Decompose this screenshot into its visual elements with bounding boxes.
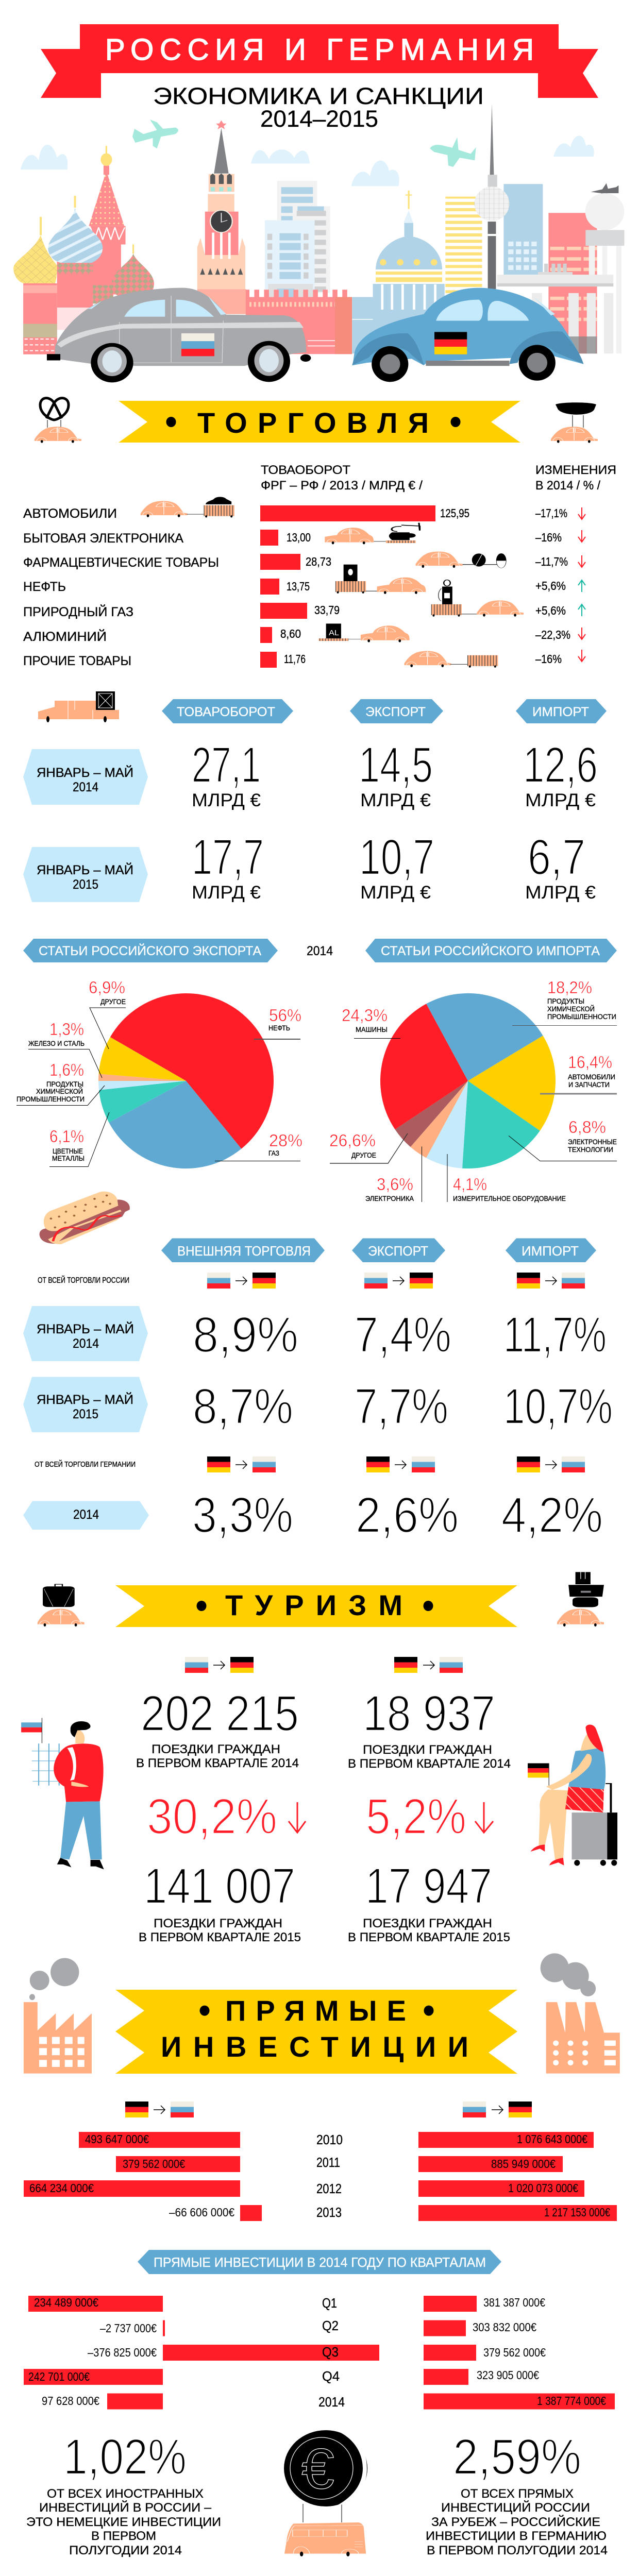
export pie labels: 6,9%	[89, 978, 125, 997]
tourism: germans to russia: В ПЕРВОМ КВАРТАЛЕ 2015	[348, 1930, 510, 1944]
values 2015: МЛРД €	[360, 883, 431, 903]
quarter labels	[318, 2295, 345, 2410]
investment flags	[125, 2102, 532, 2117]
percentages 2014: 8,9%	[193, 1307, 298, 1363]
callout: 2.59 percent: ЗА РУБЕЖ – РОССИЙСКИЕ	[431, 2515, 600, 2529]
export pie labels: МЕТАЛЛЫ	[52, 1154, 85, 1162]
export pie labels: ХИМИЧЕСКОЙ	[36, 1087, 83, 1095]
tourism: germans to russia: 17 947	[365, 1858, 492, 1914]
bar chart: quarterly investment germany to russia: –376 825 000€	[88, 2346, 157, 2359]
values 2014: МЛРД €	[360, 790, 431, 810]
quarter labels: 2014	[318, 2394, 345, 2410]
panel: foreign trade share headers	[161, 1239, 596, 1262]
callout: 2.59 percent: В ПЕРВОМ ПОЛУГОДИИ 2014	[427, 2544, 608, 2557]
bar chart: annual investment russia to germany: 885 949 000€	[491, 2157, 556, 2171]
import pie labels: И ЗАПЧАСТИ	[568, 1080, 610, 1089]
import pie labels: ХИМИЧЕСКОЙ	[547, 1004, 595, 1013]
import pie labels: ДРУГОЕ	[351, 1151, 376, 1159]
export pie labels	[16, 978, 302, 1166]
callout: 1.02 percent: 1,02%	[63, 2429, 187, 2485]
trade table heading: ТОВАОБОРОТ	[261, 463, 350, 477]
trade table category labels: ПРОЧИЕ ТОВАРЫ	[23, 654, 131, 668]
pie headers	[23, 939, 617, 962]
period label: january-may 2014 share: ЯНВАРЬ – МАЙ	[37, 1321, 134, 1336]
import pie labels: 4,1%	[453, 1175, 487, 1194]
trade row icons: cars pulling goods	[141, 497, 524, 668]
label: share of all german trade with flags: ОТ ВСЕЙ ТОРГОВЛИ ГЕРМАНИИ	[35, 1460, 136, 1469]
callout: 1.02 percent: ОТ ВСЕХ ИНОСТРАННЫХ	[47, 2487, 204, 2501]
bar chart: annual investment germany to russia: 379 562 000€	[123, 2157, 185, 2171]
import pie labels: 6,8%	[568, 1117, 606, 1137]
trade table heading	[261, 463, 616, 493]
trade table changes and arrows: –11,7%	[535, 555, 568, 568]
values 2015	[192, 829, 596, 903]
bar chart: annual investment russia to germany	[418, 2132, 617, 2221]
panel: turnover headers: ТОВАРОБОРОТ	[177, 705, 275, 719]
values 2014: 14,5	[359, 737, 433, 793]
panel: foreign trade share headers: ЭКСПОРТ	[368, 1243, 428, 1259]
trade table heading: ИЗМЕНЕНИЯ	[535, 463, 616, 477]
export pie labels: ПРОДУКТЫ	[46, 1080, 83, 1088]
values 2014	[192, 737, 598, 810]
callout: 1.02 percent: В ПЕРВОМ	[91, 2529, 156, 2543]
tourism: germans to russia: ПОЕЗДКИ ГРАЖДАН	[363, 1743, 492, 1757]
values 2015: 10,7	[359, 829, 434, 885]
values 2015: МЛРД €	[192, 883, 261, 903]
percentages 2014	[193, 1307, 607, 1363]
export pie labels: ЖЕЛЕЗО И СТАЛЬ	[28, 1039, 85, 1047]
heading: quarterly investment	[138, 2250, 501, 2274]
tourism: russians to germany: 30,2%	[147, 1788, 277, 1844]
values 2015: 6,7	[528, 829, 585, 885]
import pie labels: 3,6%	[377, 1175, 413, 1194]
bar chart: quarterly investment russia to germany	[424, 2296, 615, 2409]
tourism: russians to germany: ПОЕЗДКИ ГРАЖДАН	[152, 1742, 280, 1756]
section banner: trade: ТОРГОВЛЯ	[197, 406, 429, 439]
tourism: russians to germany: ПОЕЗДКИ ГРАЖДАН	[154, 1917, 282, 1930]
export pie labels: ГАЗ	[268, 1149, 279, 1157]
trade table changes and arrows: –16%	[535, 652, 562, 666]
bar chart: quarterly investment germany to russia: –2 737 000€	[100, 2321, 157, 2335]
figure: man with russian flag	[21, 1718, 104, 1869]
section banner: direct investment: ПРЯМЫЕ	[225, 1994, 406, 2027]
export pie labels: 28%	[269, 1131, 302, 1150]
aluminium label: AL	[329, 629, 339, 637]
planes	[132, 120, 476, 167]
quarter labels: Q3	[322, 2344, 339, 2360]
icon: factory right	[541, 1953, 620, 2074]
title ribbon: РОССИЯ И ГЕРМАНИЯ	[105, 33, 534, 66]
label: share of all russian trade with flags: ОТ ВСЕЙ ТОРГОВЛИ РОССИИ	[38, 1275, 129, 1285]
trade table changes and arrows: +5,6%	[535, 579, 566, 592]
bar chart: trade turnover: 13,00	[287, 531, 311, 544]
tv tower	[490, 104, 494, 175]
bar chart: trade turnover	[260, 505, 469, 668]
clouds	[21, 135, 594, 186]
period label: january-may 2015: 2015	[73, 877, 98, 892]
tourism: russians to germany: 141 007	[144, 1858, 295, 1914]
values 2015: МЛРД €	[525, 883, 596, 903]
trade table category labels: АВТОМОБИЛИ	[23, 506, 117, 521]
quarter labels: Q2	[322, 2318, 339, 2333]
period label: january-may 2015: ЯНВАРЬ – МАЙ	[37, 862, 133, 877]
export pie labels: НЕФТЬ	[268, 1024, 290, 1032]
label: share of all german trade with flags	[35, 1456, 585, 1472]
trade table category labels: АЛЮМИНИЙ	[23, 629, 107, 644]
bar chart: quarterly investment germany to russia: 242 701 000€	[28, 2370, 90, 2383]
export pie labels: ПРОМЫШЛЕННОСТИ	[16, 1095, 85, 1103]
period label: january-may 2014 share: 2014	[73, 1336, 99, 1351]
central buildings	[277, 181, 317, 223]
section banner: tourism: ТУРИЗМ	[225, 1589, 402, 1621]
bar chart: quarterly investment russia to germany: 381 387 000€	[483, 2296, 545, 2309]
trade table category labels: БЫТОВАЯ ЭЛЕКТРОНИКА	[23, 531, 183, 546]
trade table changes and arrows: –22,3%	[535, 628, 570, 641]
values 2015: 17,7	[192, 829, 264, 885]
icon: factory left	[24, 1958, 92, 2074]
trade table changes and arrows	[535, 506, 585, 666]
section banner: direct investment	[115, 1990, 517, 2074]
tourism: germans to russia	[348, 1685, 511, 1944]
period label: january-may 2015 share: ЯНВАРЬ – МАЙ	[37, 1392, 133, 1407]
callout: 2.59 percent	[426, 2429, 608, 2557]
callout: 2.59 percent: ИНВЕСТИЦИИ В ГЕРМАНИЮ	[426, 2529, 607, 2543]
percentages 2014: 11,7%	[503, 1307, 607, 1363]
label: share of all russian trade with flags	[38, 1273, 585, 1289]
tourism: germans to russia: ПОЕЗДКИ ГРАЖДАН	[363, 1917, 492, 1930]
pie headers: СТАТЬИ РОССИЙСКОГО ИМПОРТА	[381, 943, 600, 958]
tourism: russians to germany: 202 215	[141, 1685, 299, 1741]
period label: january-may 2015	[23, 847, 148, 902]
tourism: germans to russia: 5,2%	[366, 1788, 466, 1844]
import pie labels: 26,6%	[329, 1131, 376, 1150]
import pie labels: 16,4%	[568, 1053, 612, 1072]
figure: woman with german flag on suitcase	[528, 1724, 617, 1866]
import pie labels: ЭЛЕКТРОННЫЕ	[568, 1138, 617, 1146]
export pie labels: 1,6%	[49, 1060, 84, 1079]
bar chart: annual investment russia to germany: 1 217 153 000€	[544, 2206, 610, 2219]
percentages germany 2014: 2,6%	[356, 1487, 459, 1543]
kremlin wall	[246, 290, 351, 298]
tourism: russians to germany: В ПЕРВОМ КВАРТАЛЕ 2015	[139, 1930, 301, 1944]
investment year labels: 2012	[316, 2181, 342, 2196]
icons: cars with luggage	[38, 1570, 604, 1626]
callout: 2.59 percent: 2,59%	[453, 2429, 581, 2485]
icon: car with pretzel	[35, 398, 81, 443]
percentages 2015: 8,7%	[193, 1378, 293, 1434]
spasskaya tower	[214, 128, 229, 174]
bar chart: trade turnover: 11,76	[284, 652, 306, 666]
import pie labels: 24,3%	[342, 1006, 388, 1025]
period label: january-may 2014: ЯНВАРЬ – МАЙ	[37, 765, 133, 780]
title ribbon	[41, 24, 598, 98]
export pie labels: 6,1%	[49, 1127, 84, 1146]
section banner: trade	[119, 401, 520, 443]
export pie labels: 56%	[269, 1006, 301, 1025]
period label: january-may 2014 share	[23, 1306, 148, 1361]
import pie labels: ПРОДУКТЫ	[547, 997, 584, 1005]
bar chart: annual investment germany to russia	[24, 2132, 262, 2221]
quarter labels: Q4	[322, 2368, 340, 2384]
bar chart: trade turnover: 125,95	[440, 506, 469, 520]
bar chart: trade turnover: 28,73	[306, 555, 331, 568]
bar chart: quarterly investment germany to russia	[24, 2296, 379, 2409]
tourism: germans to russia: 18 937	[363, 1685, 495, 1741]
period label: 2014	[23, 1501, 149, 1530]
heading: quarterly investment: ПРЯМЫЕ ИНВЕСТИЦИИ В 2014 ГОДУ ПО КВАРТАЛАМ	[154, 2255, 486, 2270]
period label: january-may 2014	[23, 749, 148, 805]
saint basil	[548, 213, 597, 353]
bar chart: quarterly investment russia to germany: 303 832 000€	[473, 2320, 536, 2334]
panel: turnover headers: ЭКСПОРТ	[365, 705, 426, 719]
investment year labels: 2011	[316, 2155, 340, 2170]
bar chart: annual investment germany to russia: 493 647 000€	[85, 2132, 149, 2146]
icon: car with sofa	[551, 402, 598, 443]
bar chart: annual investment germany to russia: 664 234 000€	[29, 2181, 94, 2195]
trade table changes and arrows: –17,1%	[535, 506, 567, 520]
percentages 2014: 7,4%	[355, 1307, 451, 1363]
subtitle: ЭКОНОМИКА И САНКЦИИ	[153, 83, 484, 109]
import pie labels: АВТОМОБИЛИ	[568, 1073, 615, 1081]
bar chart: quarterly investment germany to russia: 234 489 000€	[34, 2296, 98, 2309]
section banner: direct investment: ИНВЕСТИЦИИ	[161, 2030, 468, 2063]
bar chart: trade turnover: 13,75	[287, 580, 310, 593]
values 2014: 27,1	[192, 737, 261, 793]
trade table changes and arrows: +5,6%	[535, 604, 566, 617]
bar chart: quarterly investment germany to russia: 97 628 000€	[42, 2394, 99, 2408]
trade table category labels: ФАРМАЦЕВТИЧЕСКИЕ ТОВАРЫ	[23, 555, 219, 570]
bar chart: annual investment russia to germany: 1 076 643 000€	[517, 2132, 587, 2146]
pie chart: russian imports	[380, 993, 556, 1168]
investment year labels: 2013	[316, 2205, 342, 2220]
quarter labels: Q1	[322, 2295, 337, 2311]
icon: bus with euro coin: €	[301, 2437, 334, 2501]
tourism: germans to russia: В ПЕРВОМ КВАРТАЛЕ 2014	[348, 1757, 511, 1771]
callout: 2.59 percent: ОТ ВСЕХ ПРЯМЫХ	[461, 2487, 574, 2501]
trade table changes and arrows: –16%	[535, 531, 562, 544]
subtitle	[153, 83, 484, 132]
city illustration	[13, 104, 625, 382]
section banner: tourism	[115, 1585, 517, 1627]
bar chart: annual investment germany to russia: –66 606 000€	[169, 2206, 234, 2219]
callout: 1.02 percent	[26, 2429, 221, 2557]
percentages germany 2014: 3,3%	[192, 1487, 293, 1543]
import pie labels: ТЕХНОЛОГИИ	[568, 1145, 613, 1154]
investment year labels: 2010	[316, 2132, 343, 2147]
icon: hot dog	[40, 1192, 130, 1244]
bar chart: quarterly investment russia to germany: 379 562 000€	[483, 2346, 546, 2359]
icon: bus with euro coin	[284, 2430, 367, 2556]
values 2014: МЛРД €	[192, 790, 261, 810]
tourism flags	[185, 1657, 463, 1673]
period label: january-may 2015 share	[23, 1377, 148, 1432]
trade table heading: ФРГ – РФ / 2013 / МЛРД € /	[261, 479, 423, 493]
pie headers: СТАТЬИ РОССИЙСКОГО ЭКСПОРТА	[39, 943, 261, 958]
pie headers: 2014	[307, 944, 333, 958]
callout: 1.02 percent: ПОЛУГОДИИ 2014	[69, 2544, 182, 2557]
values 2014: МЛРД €	[525, 790, 596, 810]
tourism: russians to germany	[136, 1685, 306, 1944]
tourism: russians to germany: В ПЕРВОМ КВАРТАЛЕ 2014	[136, 1756, 299, 1770]
gray car	[47, 288, 311, 382]
values 2014: 12,6	[523, 737, 598, 793]
panel: turnover headers	[162, 699, 607, 723]
callout: 1.02 percent: ЭТО НЕМЕЦКИЕ ИНВЕСТИЦИИ	[26, 2515, 221, 2529]
percentages 2015: 7,7%	[355, 1378, 448, 1434]
percentages germany 2014	[192, 1487, 603, 1543]
callout: 1.02 percent: ИНВЕСТИЦИЙ В РОССИИ –	[39, 2500, 212, 2515]
bar chart: trade turnover: 8,60	[280, 627, 301, 640]
import pie labels: ЭЛЕКТРОНИКА	[365, 1194, 414, 1202]
import pie labels: МАШИНЫ	[356, 1025, 388, 1033]
reichstag	[352, 297, 445, 353]
import pie labels: ПРОМЫШЛЕННОСТИ	[547, 1012, 616, 1021]
import pie labels	[329, 978, 617, 1202]
period label: 2014: 2014	[73, 1507, 99, 1522]
percentages 2015	[193, 1378, 613, 1434]
pie chart: russian exports	[98, 993, 274, 1168]
panel: turnover headers: ИМПОРТ	[532, 705, 589, 719]
trade table category labels: НЕФТЬ	[23, 580, 66, 594]
tower and gate	[550, 248, 597, 319]
export pie labels: ДРУГОЕ	[100, 997, 126, 1006]
panel: foreign trade share headers: ИМПОРТ	[522, 1243, 579, 1259]
import pie labels: ИЗМЕРИТЕЛЬНОЕ ОБОРУДОВАНИЕ	[453, 1194, 566, 1202]
icon: truck with box	[38, 691, 119, 722]
trade table heading: В 2014 / % /	[535, 479, 600, 493]
export pie labels: 1,3%	[49, 1020, 84, 1039]
blue car	[352, 288, 583, 382]
period label: january-may 2015 share: 2015	[73, 1407, 98, 1421]
bar chart: quarterly investment russia to germany: 1 387 774 000€	[537, 2394, 606, 2408]
percentages germany 2014: 4,2%	[501, 1487, 603, 1543]
subtitle: 2014–2015	[260, 106, 378, 132]
investment year labels	[316, 2132, 343, 2220]
import pie labels: 18,2%	[547, 978, 592, 997]
callout: 2.59 percent: ИНВЕСТИЦИЙ РОССИИ	[441, 2500, 590, 2515]
export pie labels: ЦВЕТНЫЕ	[53, 1147, 83, 1155]
period label: january-may 2014: 2014	[73, 780, 98, 794]
bar chart: annual investment russia to germany: 1 020 073 000€	[508, 2181, 578, 2195]
panel: foreign trade share headers: ВНЕШНЯЯ ТОРГОВЛЯ	[177, 1243, 311, 1259]
bar chart: quarterly investment russia to germany: 323 905 000€	[477, 2368, 539, 2382]
trade table category labels: ПРИРОДНЫЙ ГАЗ	[23, 604, 133, 619]
trade table category labels	[23, 506, 219, 668]
bar chart: trade turnover: 33,79	[314, 603, 340, 617]
